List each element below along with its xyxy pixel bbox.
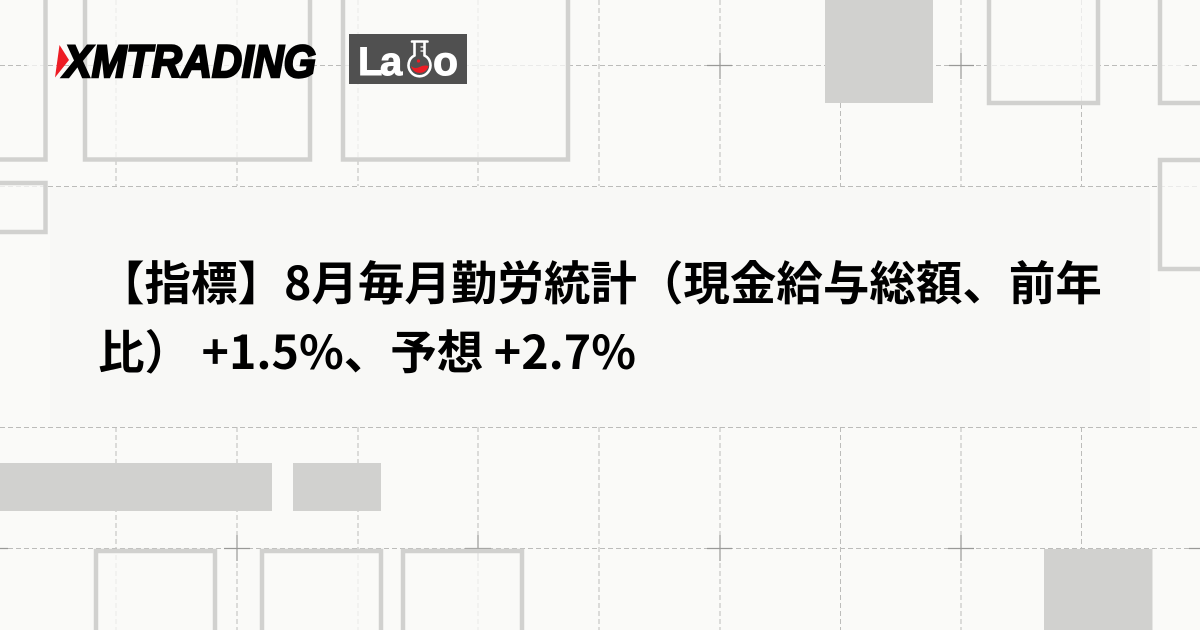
frame: top third	[343, 0, 568, 160]
logo: Lab: L	[358, 40, 382, 84]
frame: bottom first	[96, 551, 215, 630]
frame: bottom second	[262, 551, 381, 630]
solid block: top	[825, 0, 933, 103]
central text panel	[50, 187, 1150, 427]
frame: middle left	[0, 183, 46, 232]
title: 【指標】8月毎月勤労統計（現金給与総額、前年比） +1.5%、予想 +2.7%	[98, 247, 1102, 383]
logo: Lab: a	[380, 40, 403, 84]
frame: middle right	[1160, 160, 1200, 269]
logo: Lab	[349, 34, 467, 84]
icon: flask	[408, 42, 431, 76]
solid block: wide left	[0, 463, 272, 511]
frame: top left	[0, 0, 46, 160]
logo: Lab: o	[433, 38, 458, 84]
solid block: small left	[293, 463, 381, 511]
logo: XMTRADING: XMTRADING	[61, 36, 316, 87]
frame: top far right	[1160, 0, 1200, 103]
frame: top second	[85, 0, 310, 160]
frame: top right	[989, 0, 1098, 103]
frame: bottom third	[403, 551, 522, 630]
solid block: bottom right	[1044, 549, 1152, 630]
